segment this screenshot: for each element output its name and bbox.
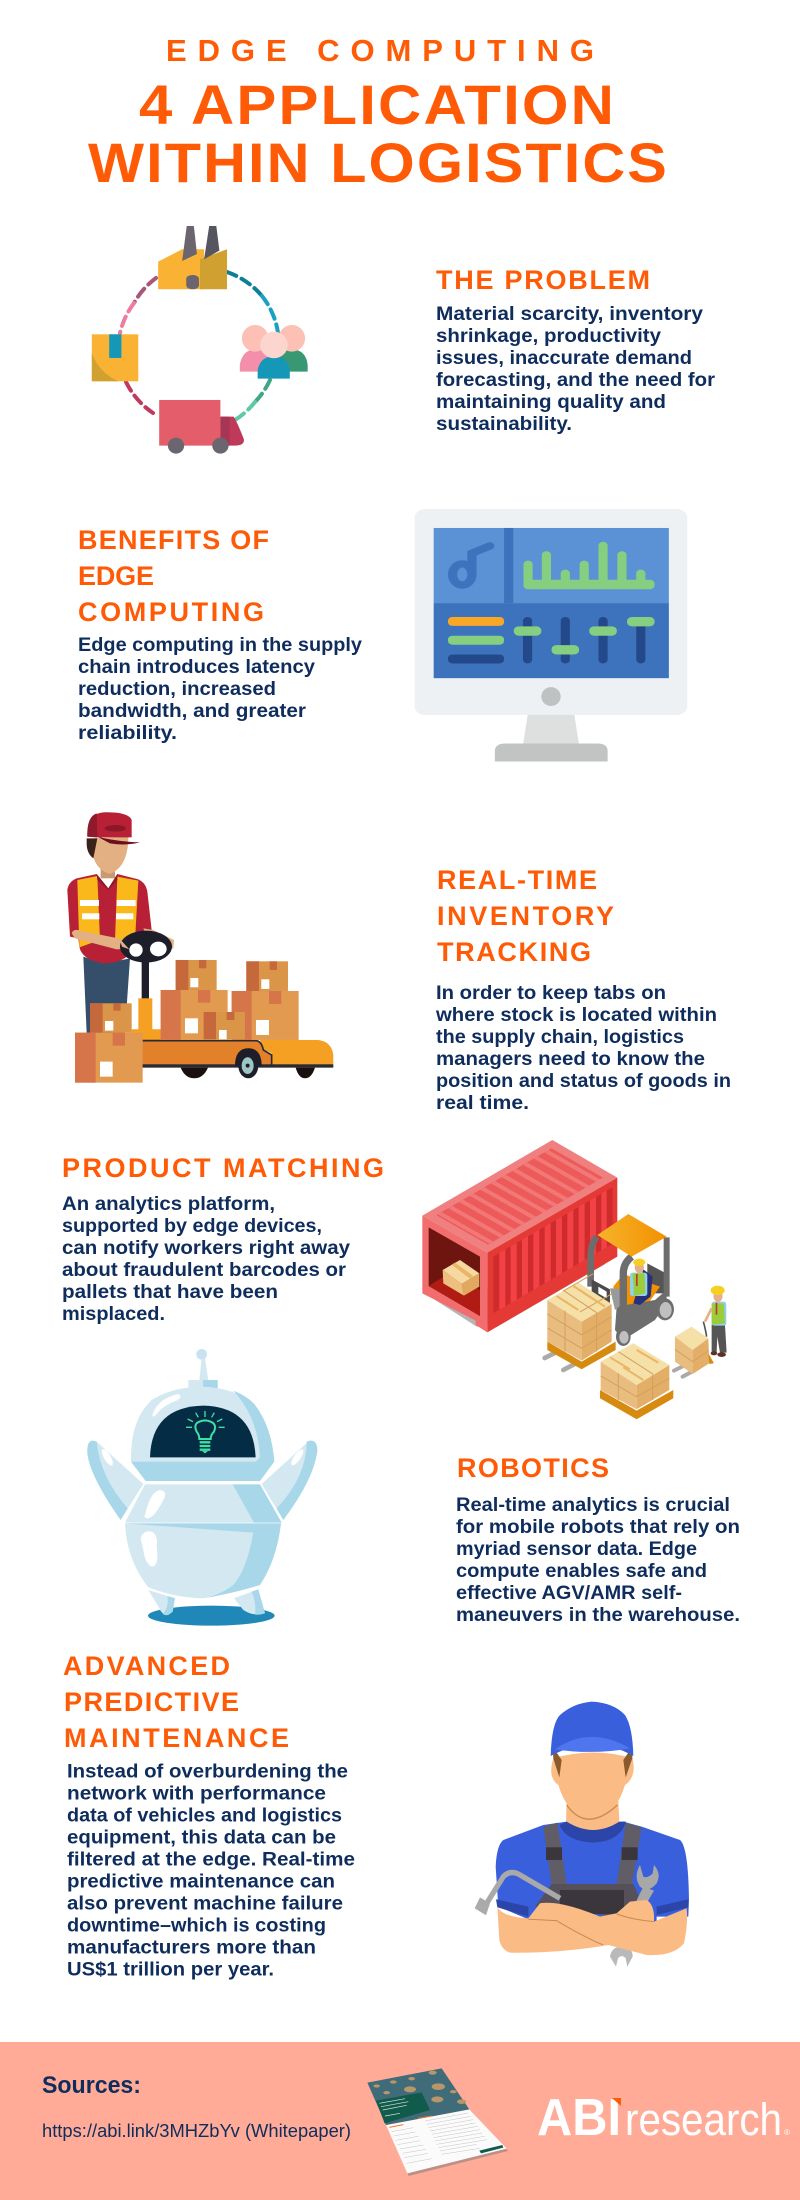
text: robotics: Real-time analytics is crucial — [456, 1494, 730, 1516]
text: advanced predictive maintenance: network with performance — [67, 1782, 326, 1804]
pallet stack two — [600, 1343, 673, 1419]
text: product matching: can notify workers right away — [62, 1237, 350, 1259]
text: the problem: sustainability. — [436, 413, 572, 435]
text: advanced predictive maintenance: Instead of overburdening the — [67, 1760, 348, 1782]
illustration: robot — [87, 1349, 317, 1626]
head and neck — [551, 1702, 634, 1843]
text: advanced predictive maintenance: also prevent machine failure — [67, 1892, 343, 1914]
heading: advanced predictive maintenance — [63, 1651, 289, 1753]
heading: sources: Sources: — [42, 2072, 141, 2099]
text: advanced predictive maintenance: manufacturers more than — [67, 1936, 316, 1958]
icon: factory — [158, 226, 227, 289]
icon: people — [240, 325, 308, 379]
text: robotics: effective AGV/AMR self- — [456, 1582, 682, 1604]
source link: https://abi.link/3MHZbYv (Whitepaper) — [42, 2121, 351, 2141]
whitepaper thumbnail — [367, 2068, 508, 2176]
heading: the problem: THE PROBLEM — [436, 265, 650, 295]
text: product matching: An analytics platform, — [62, 1193, 275, 1215]
logo: ABI research: ® — [784, 2128, 790, 2137]
text: product matching: about fraudulent barcodes or — [62, 1259, 346, 1281]
heading: robotics: ROBOTICS — [457, 1453, 609, 1483]
heading: advanced predictive maintenance: ADVANCED — [63, 1651, 230, 1681]
text: robotics: for mobile robots that rely on — [456, 1516, 740, 1538]
text: advanced predictive maintenance: equipment, this data can be — [67, 1826, 336, 1848]
heading: benefits of edge computing — [78, 525, 269, 627]
title: 4 APPLICATION — [139, 73, 616, 136]
title: EDGE COMPUTING — [166, 33, 594, 68]
title — [88, 33, 669, 194]
heading: real-time inventory tracking: INVENTORY — [437, 901, 614, 931]
text: benefits — [78, 634, 362, 744]
logo: ABI research: ABI — [537, 2089, 621, 2147]
text: the problem: issues, inaccurate demand — [436, 347, 692, 369]
forklift — [591, 1214, 674, 1346]
logo: ABI research — [537, 2089, 790, 2147]
text: real-time inventory tracking: In order to keep tabs on — [436, 982, 666, 1004]
crossed arms — [497, 1900, 687, 1955]
text: product matching: misplaced. — [62, 1303, 165, 1325]
icon: parcel — [92, 334, 138, 381]
text: real-time inventory tracking: where stock is located within — [435, 1004, 717, 1026]
text: robotics: compute enables safe and — [456, 1560, 707, 1582]
text: benefits: chain introduces latency — [78, 656, 315, 678]
overalls — [535, 1823, 645, 1917]
robot body — [125, 1484, 282, 1598]
text: advanced predictive maintenance: data of vehicles and logistics — [67, 1804, 342, 1826]
icon: truck — [159, 400, 244, 454]
title: WITHIN LOGISTICS — [88, 131, 669, 194]
text: advanced predictive maintenance — [67, 1760, 355, 1980]
text: advanced predictive maintenance: predictive maintenance can — [67, 1870, 335, 1892]
text: advanced predictive maintenance: downtime–which is costing — [67, 1914, 326, 1936]
boxes — [75, 960, 299, 1083]
text: real-time inventory tracking: the supply chain, logistics — [436, 1026, 684, 1048]
text: real-time inventory tracking: position and status of goods in — [436, 1070, 731, 1092]
text: the problem: maintaining quality and — [436, 391, 666, 413]
robot head — [131, 1349, 274, 1481]
text: benefits: reliability. — [78, 722, 177, 744]
heading: advanced predictive maintenance: MAINTENANCE — [64, 1723, 289, 1753]
shirt — [496, 1822, 689, 1923]
footer band — [0, 2042, 800, 2200]
text: advanced predictive maintenance: filtered at the edge. Real-time — [67, 1848, 355, 1870]
container — [422, 1140, 617, 1332]
text: robotics — [456, 1494, 740, 1626]
pallet stack three and worker — [674, 1286, 727, 1377]
robot screen with light bulb — [150, 1406, 256, 1457]
icon: supply chain cycle — [92, 226, 308, 454]
text: advanced predictive maintenance: US$1 trillion per year. — [67, 1958, 274, 1980]
text: the problem — [436, 303, 715, 435]
text: the problem: Material scarcity, inventory — [436, 303, 703, 325]
heading: benefits of edge computing: COMPUTING — [78, 597, 264, 627]
text: real-time inventory tracking: real time. — [436, 1092, 529, 1114]
robot arms — [87, 1441, 317, 1520]
illustration: warehouse worker with pallet truck — [67, 812, 333, 1083]
icon: monitor dashboard — [415, 509, 687, 761]
heading: benefits of edge computing: BENEFITS OF — [78, 525, 269, 555]
text: benefits: Edge computing in the supply — [78, 634, 362, 656]
text: product matching: pallets that have been — [62, 1281, 278, 1303]
tools — [475, 1865, 659, 1915]
text: robotics: maneuvers in the warehouse. — [456, 1604, 740, 1626]
logo: ABI research: research — [625, 2094, 782, 2145]
text: real-time inventory tracking: managers need to know the — [436, 1048, 705, 1070]
illustration: shipping container and forklift — [422, 1140, 727, 1419]
pallet stack one — [545, 1274, 616, 1370]
heading: real-time inventory tracking — [437, 865, 614, 967]
text: benefits: bandwidth, and greater — [78, 700, 306, 722]
text: product matching: supported by edge devices, — [62, 1215, 322, 1237]
robot feet — [148, 1589, 265, 1615]
lower wrench — [610, 1947, 633, 1967]
text: robotics: myriad sensor data. Edge — [456, 1538, 697, 1560]
illustration: mechanic — [475, 1702, 689, 1967]
heading: advanced predictive maintenance: PREDICTIVE — [64, 1687, 239, 1717]
text: benefits: reduction, increased — [78, 678, 276, 700]
heading: product matching: PRODUCT MATCHING — [62, 1153, 384, 1183]
heading: real-time inventory tracking: REAL-TIME — [437, 865, 597, 895]
text: the problem: shrinkage, productivity — [436, 325, 661, 347]
heading: real-time inventory tracking: TRACKING — [437, 937, 591, 967]
text: real-time inventory tracking — [435, 982, 731, 1114]
heading: benefits of edge computing: EDGE — [78, 561, 154, 591]
text: the problem: forecasting, and the need for — [436, 369, 715, 391]
text: product matching — [62, 1193, 350, 1325]
